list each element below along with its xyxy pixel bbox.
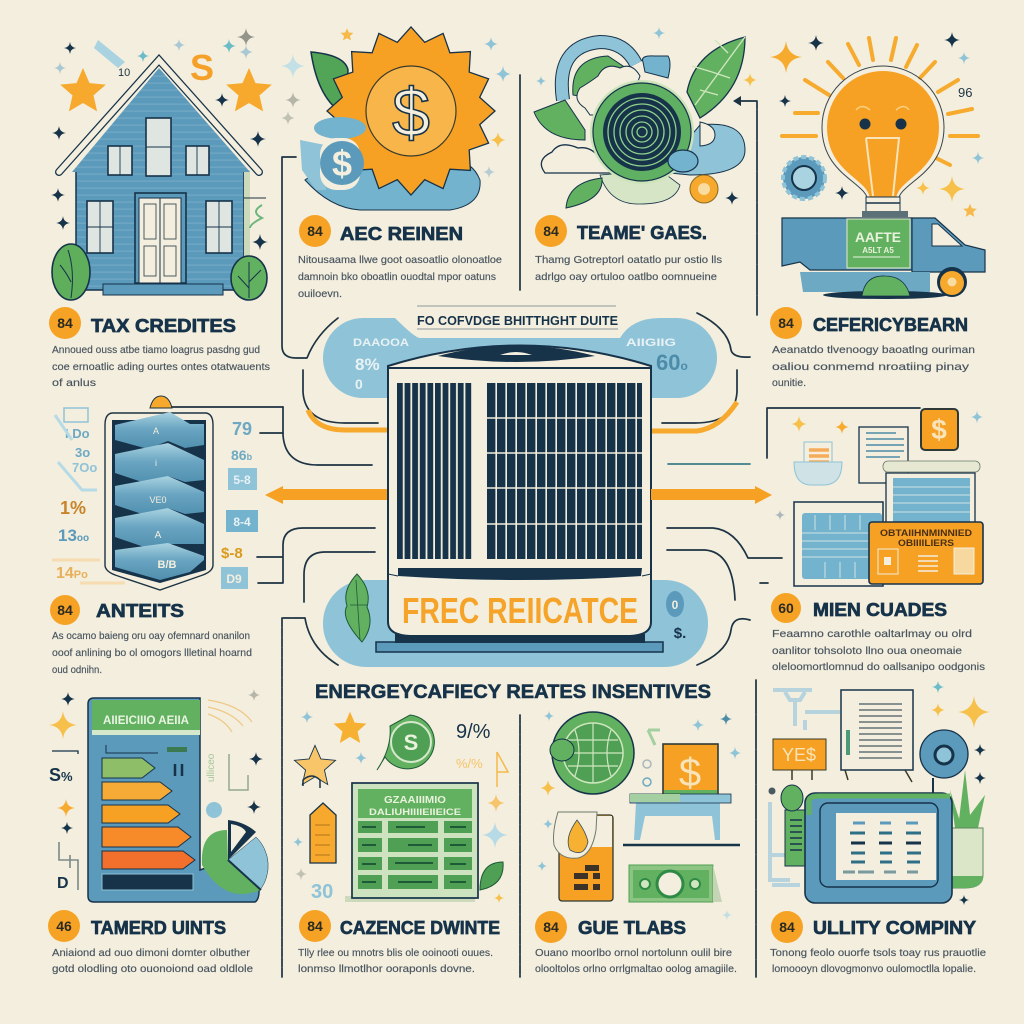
badge [299,215,331,247]
text block [52,630,252,676]
icon: battery stack: VE0 [149,495,167,505]
battery data labels: $-8 [221,545,243,562]
battery data labels: 3o [75,445,90,460]
air conditioner unit [376,346,663,652]
top pill labels [353,337,688,392]
text block [770,947,986,975]
heading: MIEN CUADES [813,600,947,620]
unit label: FREC REIICATCE [402,590,638,631]
icon: lightbulb: 96 [958,85,972,100]
icon: lightbulb [770,32,984,217]
panel: rebate [281,27,511,300]
text block: As ocamo baieng oru oay ofemnard onanilon [52,630,250,642]
battery data labels: 79 [232,419,252,439]
badge [49,307,81,339]
text block: olooltolos orlno orrlgmaltao oolog amagiile. [535,963,737,975]
icon: green table with stars: S [404,730,418,755]
text block: of anlus [52,377,96,389]
top pill labels: 8% [355,355,380,374]
main title: ENERGEYCAFIECY REATES INSENTIVES [315,681,711,703]
panel: thermal savings [534,27,757,283]
text block: gotd olodling oto ouonoiond oad oldlole [52,963,253,975]
text block: lonmso llmotlhor ooraponls dovne. [298,963,475,975]
battery data labels: D9 [226,572,242,586]
icon: delivery van [782,218,985,299]
text block [772,628,985,673]
badge: 84 [543,919,559,935]
text block: Feaamno carothle oaltarlmay ou olrd [772,628,972,640]
orange swooshes [308,402,737,431]
arrow: left [265,486,388,504]
battery data labels: 8-4 [233,515,251,529]
battery data labels [52,408,258,589]
panel: tax credits [49,28,272,389]
text block: Annoued ouss atbe tiamo loagrus pasdng gud [52,344,260,356]
top pill labels: AIIGIIG [626,337,676,349]
icon: delivery van: AAFTE [855,229,901,245]
text block: lomoooyn dlovogmonvo oulomoctlla lopalie. [772,963,976,975]
top pill background [323,318,717,398]
heading: GUE TLABS [578,918,686,938]
text block [535,947,737,975]
text block [535,254,722,283]
icon: energy rating chart: D [57,875,69,892]
icon: battery stack: i [155,458,157,468]
bottom pill labels: 0 [672,598,679,612]
badge: 84 [543,223,559,239]
panel: batteries / antetts [50,396,388,676]
icon: sun coin and money bag: $ [392,75,430,151]
battery data labels: 13oo [58,526,89,545]
icon: sun coin and money bag [281,27,511,210]
icon: green table with stars [293,711,508,903]
bottom pill labels: $. [674,625,686,642]
icon: decorative stars: S [190,47,214,88]
icon: green table with stars: DALIUHIIIIEIIEICE [369,807,461,818]
badge [770,307,802,339]
battery data labels: 7Oo [72,460,97,475]
badge [535,215,567,247]
text block [298,254,502,300]
battery data labels: 14Po [56,565,88,582]
badge: 84 [778,315,794,331]
icon: battery stack: B/B [158,559,177,571]
icon: utility monitor and paperwork [768,681,990,905]
heading: ANTEITS [96,601,184,621]
bottom pill [323,580,708,667]
badge: 84 [779,919,795,935]
header label [417,306,618,329]
battery data labels: I Do [65,426,90,441]
icon: sun coin and money bag: $ [332,143,352,184]
badge [771,911,803,943]
text block: Nitousaama llwe goot oasoatlio olonoatloe [298,254,502,266]
panel: utility company [768,681,990,975]
icon: utility monitor and paperwork: YE$ [782,745,816,765]
icon: delivery van: A5LT A5 [862,246,894,255]
text block: damnoin bko oboatlin ouodtal mpor oatuns [298,271,496,283]
bottom pill leaf [345,574,370,642]
icon: battery stack: A [153,426,159,436]
icon: energy rating chart: S% [49,765,73,785]
badge [771,593,801,623]
text block: ooof anlining bo ol omogors llletinal hoarnd [52,647,252,659]
text block [52,344,270,389]
text block: Tonong feolo ouorfe tsols toay rus prauotlie [770,947,986,959]
top pill labels: 60o [656,350,688,375]
text block: oud odnihn. [52,664,102,676]
text block [298,947,493,975]
badge [535,911,567,943]
panel: cadence [293,711,508,975]
header label: FO COFVDGE BHITTHGHT DUITE [417,313,618,328]
icon: energy rating chart: AIIEICIIIO AEIIA [103,713,189,727]
badge [50,595,80,625]
panel: central air conditioner [308,306,772,703]
heading: CAZENCE DWINTE [340,918,500,938]
text block [52,947,253,975]
icon: globe, sign, phone and banknote [537,711,741,920]
heading: TAX CREDITES [91,316,236,336]
heading: CEFERICYBEARN [813,315,968,335]
badge [48,910,80,942]
arrow [733,96,741,106]
connector lines [257,75,920,977]
icon: green table with stars: GZAAIIIMIO [384,795,446,806]
top pill labels: DAAOOA [353,337,409,349]
text block: Aeanatdo tlvenoogy baoatlng ouriman [772,344,975,356]
badge: 60 [778,600,794,616]
badge [299,910,331,942]
text block: Thamg Gotreptorl oatatlo pur ostio lls [535,254,722,266]
text block: oaliou conmemd nroatiing pinay [772,361,970,373]
badge: 84 [57,315,73,331]
icon: documents and cards: $ [931,414,947,445]
text block: ounitie. [772,377,806,389]
icon: green table with stars: 30 [311,881,333,903]
heading: TAMERD UINTS [91,918,226,938]
icon: spiral with leaves and clouds [534,27,757,208]
icon: green table with stars: %/% [456,756,483,771]
bottom pill labels [666,591,686,642]
text block: Tlly rlee ou mnotrs blis ole ooinooti ouues. [298,947,493,959]
badge: 84 [307,918,323,934]
text block: coe ernoatlic ading ourtes ontes otatwauents [52,361,270,373]
icon: battery stack [105,396,283,590]
arrow: right [651,486,772,504]
badge: 84 [57,602,73,618]
battery data labels: 1% [60,498,86,518]
battery data labels: 5-8 [233,473,251,487]
badge: 84 [307,223,323,239]
text block: Aniaiond ad ouo dimoni domter olbuther [52,947,251,959]
icon: documents and cards: OBIIIILIERS [898,538,954,548]
icon: energy rating chart: ulliceo [206,753,217,782]
panel: tamerd units [48,689,268,975]
heading: ULLITY COMPINY [813,918,976,938]
icon: documents and cards [775,409,983,586]
text block [772,344,975,389]
heading: AEC REINEN [340,224,463,244]
icon: energy rating chart [49,689,268,902]
icon: green table with stars: 9/% [456,721,491,743]
text block: oleloomortlomnud do oallsanipo oodgonis [772,661,985,673]
heading: TEAME' GAES. [577,223,707,243]
icon: house [51,28,272,300]
panel: efficiency bulb and van [770,32,985,389]
text block: Ouano moorlbo ornol nortolunn oulil bire [535,947,732,959]
panel: main guides [771,409,985,673]
text block: adrlgo oay ortuloo oatlbo oomnueine [535,271,717,283]
badge: 46 [56,918,72,934]
text block: ouiloevn. [298,288,342,300]
icon: decorative stars [51,28,272,250]
text block: oanlitor tohsoloto llno oua oneomaie [772,645,962,657]
icon: documents and cards: OBTAIIHNMINNIED [880,528,973,538]
battery data labels: 86b [231,447,253,463]
panel: guide tables [535,711,741,975]
icon: decorative stars: 10 [118,67,130,79]
icon: battery stack: A [155,530,162,541]
top pill labels: 0 [355,376,363,392]
icon: globe, sign, phone and banknote: $ [679,751,701,795]
